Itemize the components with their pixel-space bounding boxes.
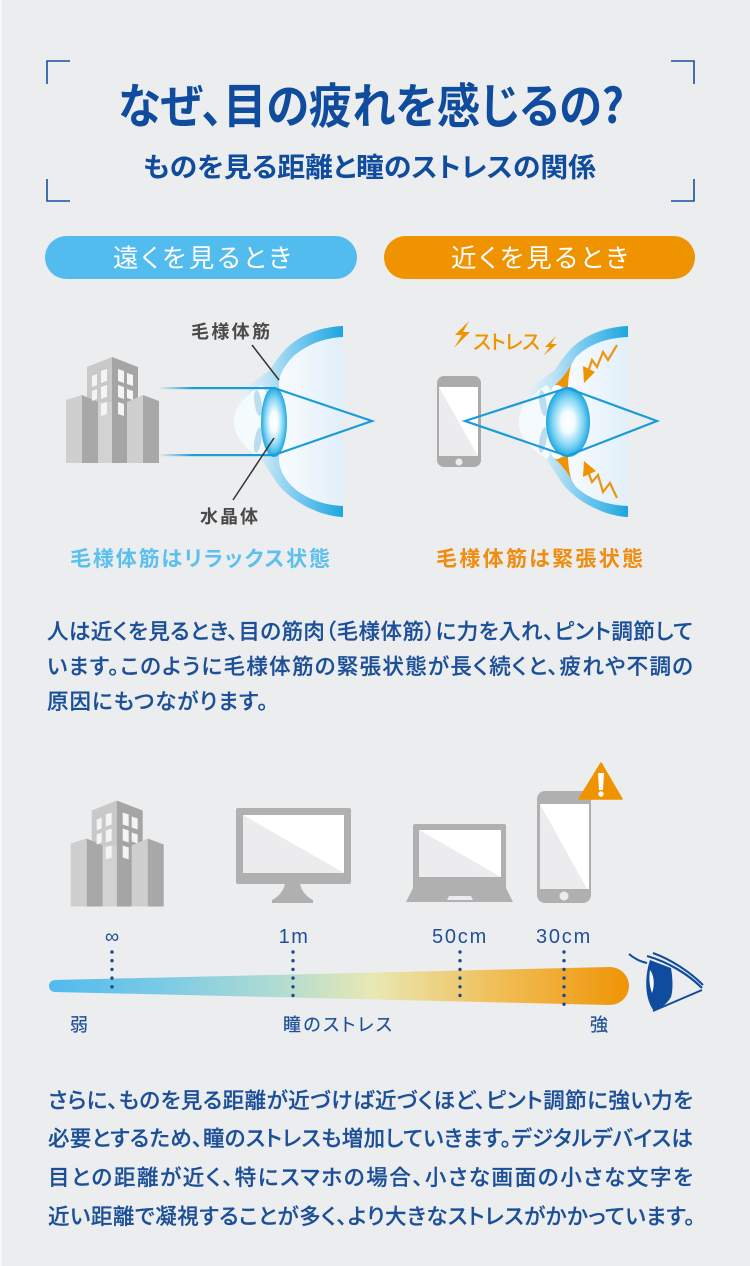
scale labels: 瞳のストレス <box>283 1011 392 1037</box>
label: crystalline lens: 水晶体 <box>200 503 258 529</box>
icon: building distance infinity <box>71 800 164 906</box>
icon: stress arrow bottom <box>583 461 617 498</box>
icon: warning triangle <box>579 763 622 799</box>
icon: stress arrow top <box>583 345 617 383</box>
pill: far viewing <box>45 236 357 279</box>
paragraph 2: 近い距離で凝視することが多く、より大きなストレスがかかっています。 <box>48 1200 695 1231</box>
icon: smartphone with warning <box>537 763 622 903</box>
label: ciliary muscle <box>191 318 279 380</box>
pill: near viewing: 近くを見るとき <box>451 238 628 275</box>
icon: laptop <box>406 824 513 902</box>
icon: smartphone <box>437 376 481 467</box>
paragraph 2: さらに、ものを見る距離が近づけば近づくほど、ピント調節に強い力を <box>48 1084 693 1115</box>
subtitle: ものを見る距離と瞳のストレスの関係 <box>143 146 596 185</box>
distance labels <box>105 926 592 948</box>
paragraph 1: 人は近くを見るとき、目の筋肉（毛様体筋）に力を入れ、ピント調節して <box>47 615 693 646</box>
distance labels: 1m <box>279 926 309 948</box>
caption: tense: 毛様体筋は緊張状態 <box>436 543 643 573</box>
paragraph 2: 目との距離が近く、特にスマホの場合、小さな画面の小さな文字を <box>48 1161 693 1192</box>
paragraph 2 <box>48 1084 695 1231</box>
dotted distance markers <box>112 952 564 1005</box>
distance labels: ∞ <box>105 926 119 948</box>
label: crystalline lens <box>200 438 274 529</box>
icon: building <box>66 357 159 463</box>
icon: lightning left <box>454 321 470 348</box>
scale labels <box>70 1011 608 1037</box>
caption: relaxed: 毛様体筋はリラックス状態 <box>70 543 330 573</box>
icon: strained eye cross-section <box>465 326 657 517</box>
label: stress: ストレス <box>473 326 540 355</box>
paragraph 2: 必要とするため、瞳のストレスも増加していきます。デジタルデバイスは <box>48 1122 693 1153</box>
diagram: near viewing <box>437 321 657 517</box>
scale labels: 強 <box>590 1011 608 1037</box>
icon: monitor <box>236 808 351 903</box>
header frame with corner brackets <box>47 61 694 201</box>
icon: eye cross-section <box>158 326 372 517</box>
stress gradient bar <box>49 967 629 1005</box>
label: ciliary muscle: 毛様体筋 <box>191 318 270 344</box>
pill: near viewing <box>384 236 695 279</box>
scale labels: 弱 <box>70 1011 88 1037</box>
paragraph 1 <box>47 615 693 716</box>
diagram: far viewing <box>66 318 372 529</box>
distance labels: 50cm <box>432 926 488 948</box>
paragraph 1: 原因にもつながります。 <box>47 685 268 716</box>
pill: far viewing: 遠くを見るとき <box>113 238 291 275</box>
icon: eye <box>629 953 703 1011</box>
distance labels: 30cm <box>536 926 592 948</box>
paragraph 1: います。このように毛様体筋の緊張状態が長く続くと、疲れや不調の <box>47 650 693 681</box>
icon: lightning right <box>543 336 557 356</box>
title: なぜ、目の疲れを感じるの? <box>118 67 624 137</box>
